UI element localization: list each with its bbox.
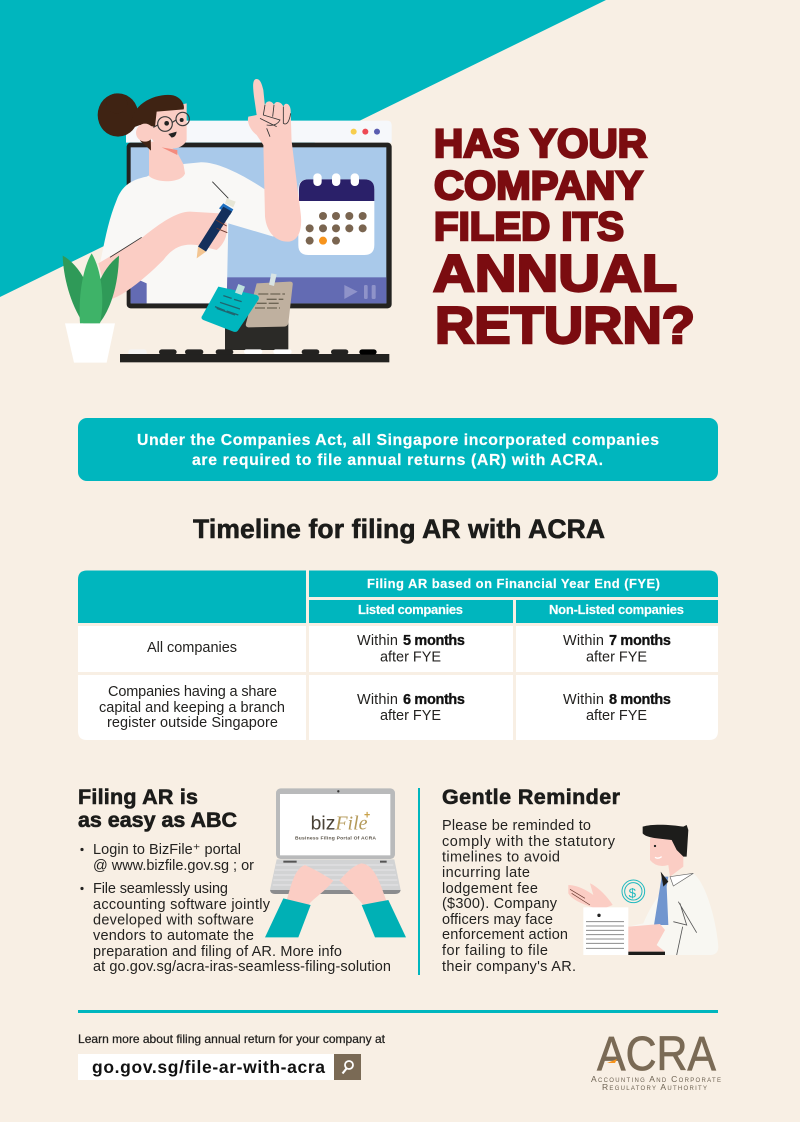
table: filing timeline [78, 570, 718, 740]
logo: ACRA: ACRA [597, 1028, 716, 1081]
title: HAS YOUR [434, 122, 647, 166]
icon: laptop with bizFile: biz [311, 813, 335, 834]
row: branch register outside Singapore: Companies having a share [108, 684, 277, 700]
bullet list: accounting software jointly [93, 897, 271, 913]
bullet list: Login to BizFile⁺ portal [93, 842, 241, 858]
notes pinned on monitor [201, 273, 293, 332]
row: all companies: 5 months [403, 633, 465, 649]
monitor [126, 121, 392, 350]
row: all companies: after FYE [380, 650, 441, 666]
table header: Listed companies [358, 602, 463, 617]
reminder text: for failing to file [442, 943, 548, 959]
row: branch register outside Singapore: 6 months [403, 692, 465, 708]
row: all companies: Within [563, 633, 604, 649]
icon: calendar [298, 173, 374, 255]
title: COMPANY [434, 164, 643, 208]
row: branch register outside Singapore: capital and keeping a branch [99, 700, 285, 716]
bullet list: developed with software [93, 912, 254, 928]
title: FILED ITS [434, 205, 624, 249]
bullet list: preparation and filing of AR. More info [93, 944, 342, 960]
icon: businessman with document and coin: $ [629, 885, 637, 900]
logo: ACRA: Accounting And Corporate [591, 1074, 721, 1084]
row: branch register outside Singapore: after FYE [380, 708, 441, 724]
logo: ACRA: Regulatory Authority [602, 1082, 707, 1092]
heading: filing AR: as easy as ABC [78, 808, 237, 832]
bullet list: @ www.bizfile.gov.sg ; or [93, 858, 254, 874]
reminder text: timelines to avoid [442, 850, 560, 866]
reminder text: lodgement fee [442, 881, 538, 897]
title: ANNUAL [433, 245, 677, 303]
row: all companies: All companies [147, 640, 237, 656]
heading: filing AR: Filing AR is [78, 785, 198, 809]
row: branch register outside Singapore: register outside Singapore [107, 715, 278, 731]
table header [78, 570, 718, 623]
icon: businessman with document and coin [568, 825, 718, 955]
heading: timeline: Timeline for filing AR with ACRA [193, 514, 605, 544]
footer: learn more link: go.gov.sg/file-ar-with-acra [92, 1057, 325, 1077]
icon: laptop with bizFile [265, 788, 406, 937]
panel: filing AR is as easy as ABC [78, 785, 406, 975]
keyboard [120, 349, 389, 362]
panel: gentle reminder [442, 785, 718, 975]
bullet list: at go.gov.sg/acra-iras-seamless-filing-solution [93, 959, 391, 975]
banner: Companies Act statement: are required to file annual returns (AR) with ACRA. [192, 452, 603, 469]
reminder text: their company's AR. [442, 959, 576, 975]
row: branch register outside Singapore: 8 months [609, 692, 671, 708]
icon: search button [334, 1054, 361, 1080]
reminder text: incurring late [442, 865, 530, 881]
icon: pencil [197, 198, 236, 258]
teal background triangle [0, 0, 606, 297]
bullet list [80, 842, 391, 975]
row: branch register outside Singapore: Within [563, 692, 604, 708]
reminder text: comply with the statutory [442, 834, 616, 850]
heading: gentle reminder: Gentle Reminder [442, 785, 621, 809]
table header: Filing AR based on Financial Year End (FYE) [367, 576, 660, 591]
row: branch register outside Singapore: after FYE [586, 708, 647, 724]
row: all companies [78, 626, 718, 672]
icon: laptop with bizFile: Business Filing Portal Of ACRA [295, 835, 376, 841]
bullet list: File seamlessly using [93, 881, 228, 897]
reminder text: Please be reminded to [442, 818, 591, 834]
row: branch register outside Singapore: Within [357, 692, 398, 708]
footer: learn more link: Learn more about filing annual return for your company at [78, 1032, 386, 1046]
reminder text: enforcement action [442, 927, 568, 943]
title [433, 122, 695, 355]
reminder text: officers may face [442, 912, 553, 928]
banner: Companies Act statement: Under the Companies Act, all Singapore incorporated companies [137, 432, 659, 449]
footer: learn more link [78, 1032, 386, 1080]
reminder text [442, 818, 616, 975]
title: RETURN? [435, 297, 695, 355]
woman [98, 79, 301, 303]
icon: laptop with bizFile: File [334, 812, 368, 834]
banner: Companies Act statement [78, 418, 718, 481]
illustration: woman pointing out of monitor [63, 79, 392, 363]
row: branch register outside Singapore [78, 675, 718, 740]
row: all companies: 7 months [609, 633, 671, 649]
table header: Non-Listed companies [549, 602, 684, 617]
bullet list: vendors to automate the [93, 928, 254, 944]
row: all companies: Within [357, 633, 398, 649]
row: all companies: after FYE [586, 650, 647, 666]
reminder text: ($300). Company [442, 896, 558, 912]
icon: laptop with bizFile: + [364, 809, 370, 821]
icon: plant [63, 253, 119, 363]
heading: filing AR [78, 785, 237, 832]
